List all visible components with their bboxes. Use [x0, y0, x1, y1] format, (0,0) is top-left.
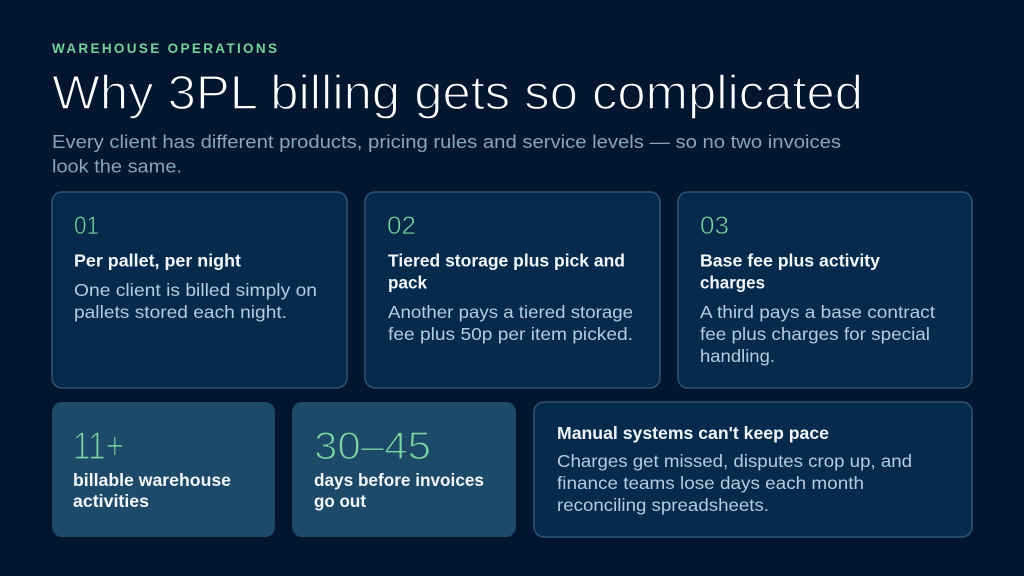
body: base fee: A third pays a base contract	[700, 302, 935, 322]
panel: stat 30-45	[292, 402, 516, 537]
subtitle	[52, 132, 841, 176]
body: per pallet: One client is billed simply on	[74, 280, 317, 300]
callout body: finance teams lose days each month	[557, 473, 864, 493]
stat number 11+: 11+	[73, 425, 124, 468]
stat number 30-45: 30–45	[314, 425, 431, 468]
panel: stat 11+	[52, 402, 275, 537]
stat label	[314, 470, 484, 511]
subtitle: Every client has different products, pricing rules and service levels — so no two invoices	[52, 132, 841, 152]
body: tiered storage: fee plus 50p per item picked.	[388, 324, 633, 344]
heading: tiered storage	[388, 250, 625, 292]
body: per pallet: pallets stored each night.	[74, 302, 287, 322]
heading: base fee: Base fee plus activity	[700, 250, 880, 270]
callout body: Charges get missed, disputes crop up, and	[557, 451, 912, 471]
number 02: 02	[387, 212, 416, 240]
stat label: go out	[314, 491, 366, 511]
panel: card 03 base fee	[678, 192, 972, 388]
title: Why 3PL billing gets so complicated	[52, 67, 863, 120]
stat label: activities	[73, 491, 149, 511]
eyebrow label: WAREHOUSE OPERATIONS	[52, 41, 277, 56]
stat label: billable warehouse	[73, 470, 231, 490]
stat label	[73, 470, 231, 511]
heading: base fee: charges	[700, 272, 765, 292]
number 03: 03	[700, 212, 729, 240]
body: base fee	[700, 302, 935, 366]
callout body	[557, 451, 912, 515]
callout body: reconciling spreadsheets.	[557, 495, 769, 515]
number 01: 01	[74, 212, 99, 240]
callout heading: Manual systems can't keep pace	[557, 423, 829, 443]
panel: card 01 per pallet	[52, 192, 347, 388]
body: per pallet	[74, 280, 317, 322]
body: tiered storage: Another pays a tiered storage	[388, 302, 633, 322]
panel: card 02 tiered storage	[365, 192, 660, 388]
body: base fee: handling.	[700, 346, 775, 366]
subtitle: look the same.	[52, 156, 182, 176]
panel: manual systems callout	[534, 402, 972, 537]
heading: tiered storage: Tiered storage plus pick and	[388, 250, 625, 270]
heading: per pallet: Per pallet, per night	[74, 250, 241, 270]
stat label: days before invoices	[314, 470, 484, 490]
heading: base fee	[700, 250, 880, 292]
heading: tiered storage: pack	[388, 272, 427, 292]
body: base fee: fee plus charges for special	[700, 324, 930, 344]
body: tiered storage	[388, 302, 633, 344]
